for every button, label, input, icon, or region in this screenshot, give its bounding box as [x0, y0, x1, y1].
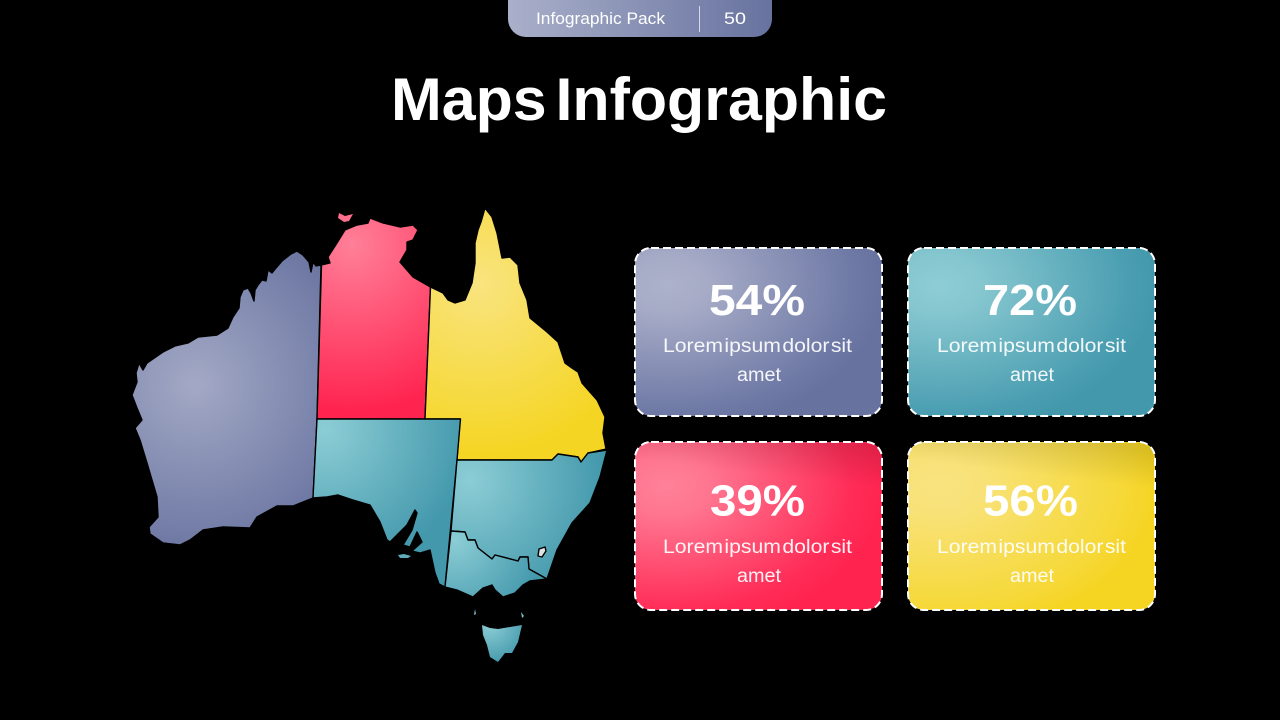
- card: 56%: [908, 442, 1155, 610]
- card: 56%: Lorem ipsum dolor sit: [937, 537, 1127, 558]
- card: 39%: amet: [737, 566, 782, 587]
- header pill: [508, 0, 772, 37]
- card: 54%: 54%: [709, 276, 805, 325]
- card: 39%: Lorem ipsum dolor sit: [663, 537, 853, 558]
- region: Tasmania: [482, 625, 522, 662]
- card: 72%: amet: [1010, 365, 1055, 386]
- region: Queensland: [425, 208, 606, 462]
- card: 54%: amet: [737, 365, 782, 386]
- region: Western Australia: [132, 251, 321, 545]
- region: New South Wales: [451, 450, 607, 579]
- title: Maps Infographic: [391, 66, 887, 133]
- card: 72%: 72%: [983, 276, 1077, 325]
- card: 72%: Lorem ipsum dolor sit: [937, 336, 1127, 357]
- region: Bathurst and Melville islands: [338, 213, 353, 222]
- region: Victoria: [445, 531, 547, 597]
- card: 56%: 56%: [983, 476, 1078, 526]
- header pill: 50: [724, 10, 746, 28]
- map of Australia: [132, 208, 607, 662]
- card: 39%: 39%: [710, 476, 805, 526]
- card: 54%: [635, 248, 882, 416]
- region: Bass Strait islands: [474, 609, 524, 618]
- region: Australian Capital Territory: [538, 547, 546, 557]
- region: Kangaroo Island: [398, 554, 411, 558]
- card: 56%: amet: [1010, 566, 1055, 587]
- region: South Australia: [313, 419, 460, 587]
- card: 72%: [908, 248, 1155, 416]
- card: 54%: Lorem ipsum dolor sit: [663, 336, 853, 357]
- card: 39%: [635, 442, 882, 610]
- region: Northern Territory: [317, 218, 430, 419]
- header pill: Infographic Pack: [536, 10, 666, 28]
